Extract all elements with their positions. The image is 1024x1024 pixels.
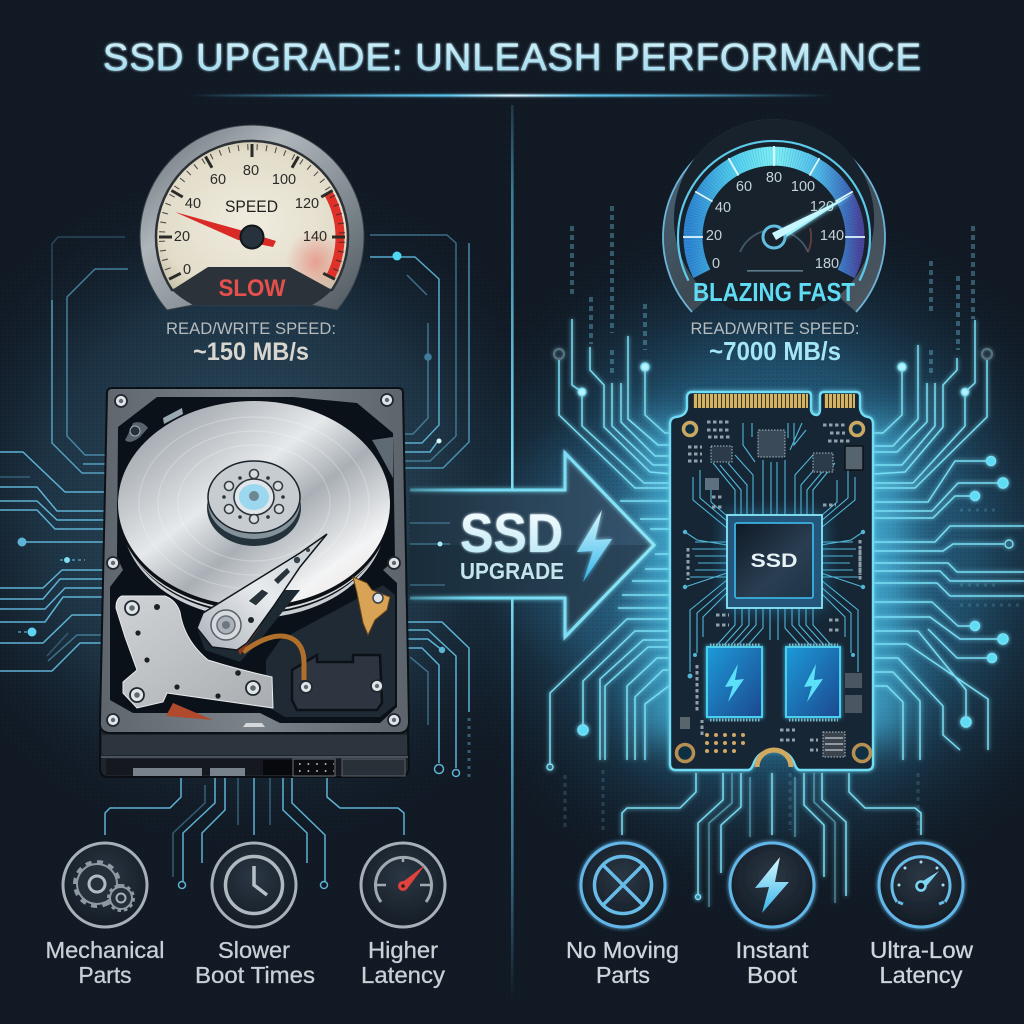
magnet plate xyxy=(116,596,273,720)
gauge numbers: 140 xyxy=(303,229,327,245)
icon: bolt xyxy=(725,664,744,702)
gauge numbers xyxy=(174,163,327,278)
chip label: SSD xyxy=(750,551,798,572)
label xyxy=(46,937,164,988)
spindle hub xyxy=(207,461,301,546)
read/write speed: HDD: READ/WRITE SPEED: xyxy=(166,319,336,338)
gauge numbers: 120 xyxy=(810,199,834,215)
gauge numbers: 0 xyxy=(712,256,720,272)
title: SSD UPGRADE: UNLEASH PERFORMANCE xyxy=(103,37,921,79)
gauge bezel xyxy=(140,125,364,310)
label: Instant xyxy=(736,937,809,963)
gauge numbers: 40 xyxy=(715,200,731,216)
icon: lightning bolt xyxy=(577,510,612,582)
benefit: higher latency xyxy=(361,843,446,988)
SSD circuit board xyxy=(670,392,873,770)
circuit traces: left side xyxy=(0,235,469,888)
gold contacts xyxy=(693,394,855,408)
actuator arm xyxy=(197,534,327,680)
drive cavity xyxy=(110,397,397,723)
speedometer: slow HDD gauge xyxy=(140,125,364,310)
icon: bolt xyxy=(804,664,823,702)
label: Parts xyxy=(78,962,132,988)
label: Boot xyxy=(747,962,798,988)
gauge dial face xyxy=(156,141,348,290)
small components xyxy=(680,422,863,757)
arrow label UPGRADE: UPGRADE xyxy=(460,558,564,584)
benefit: mechanical parts xyxy=(46,843,164,988)
gauge numbers: 80 xyxy=(766,170,782,186)
gauge numbers xyxy=(706,170,844,272)
benefit: instant boot xyxy=(730,843,814,988)
benefit: slower boot times xyxy=(195,843,315,988)
stacked platters xyxy=(122,418,386,618)
benefit: ultra-low latency xyxy=(870,843,973,988)
gauge label: SPEED xyxy=(225,198,278,216)
flash chip left xyxy=(707,645,762,720)
icon: lightning xyxy=(730,843,814,927)
read/write speed: SSD: ~7000 MB/s xyxy=(709,336,841,366)
read/write speed: HDD: ~150 MB/s xyxy=(193,338,309,366)
icon: crossed circle xyxy=(581,843,665,927)
drive base xyxy=(100,730,409,777)
arrow body xyxy=(410,453,654,637)
arrow label SSD: SSD xyxy=(460,502,563,564)
hard disk drive xyxy=(100,388,409,777)
gauge numbers: 120 xyxy=(295,196,319,212)
mounting holes xyxy=(676,422,870,762)
gauge numbers: 40 xyxy=(185,196,201,212)
gauge numbers: 80 xyxy=(243,163,259,179)
gauge numbers: 0 xyxy=(183,262,191,278)
gauge numbers: 20 xyxy=(706,228,722,244)
label: Latency xyxy=(880,962,963,988)
upgrade arrow xyxy=(405,453,654,637)
gauge needle xyxy=(780,194,853,239)
icon: latency gauge xyxy=(361,843,445,927)
label: Slower xyxy=(218,937,290,963)
read/write speed: SSD xyxy=(690,319,860,366)
connector pins xyxy=(293,759,335,776)
benefit: no moving parts xyxy=(566,843,679,988)
circuit traces: right side xyxy=(547,319,1024,907)
icon: clock xyxy=(212,843,296,927)
label: Latency xyxy=(361,962,446,988)
controller chip xyxy=(727,515,822,608)
label xyxy=(361,937,446,988)
slow label: SLOW xyxy=(218,275,286,302)
label: Higher xyxy=(368,937,438,963)
label xyxy=(870,937,973,988)
label: No Moving xyxy=(566,937,679,963)
gauge numbers: 140 xyxy=(820,228,844,244)
gauge numbers: 180 xyxy=(815,256,839,272)
blazing fast label: BLAZING FAST xyxy=(693,277,855,307)
label: Parts xyxy=(596,962,650,988)
label xyxy=(195,937,315,988)
connector box xyxy=(292,655,382,710)
icon: gears xyxy=(63,843,147,927)
gauge needle xyxy=(175,212,276,247)
gauge numbers: 20 xyxy=(174,229,190,245)
read/write speed: HDD xyxy=(166,319,336,366)
label: Ultra-Low xyxy=(870,937,973,963)
gauge dial xyxy=(674,119,874,310)
case screws xyxy=(107,394,400,726)
board traces xyxy=(683,423,865,678)
gauge bezel xyxy=(663,119,885,312)
speed band xyxy=(693,156,855,274)
label xyxy=(736,937,809,988)
orange latch xyxy=(353,577,390,635)
glow behind SSD xyxy=(640,420,905,740)
icon: speed dial xyxy=(879,843,963,927)
gauge numbers: 100 xyxy=(272,172,296,188)
label: Boot Times xyxy=(195,962,315,988)
binary data streams xyxy=(565,206,1020,830)
gauge numbers: 60 xyxy=(210,172,226,188)
label: Mechanical xyxy=(46,937,164,963)
read/write speed: SSD: READ/WRITE SPEED: xyxy=(690,319,860,338)
gauge numbers: 100 xyxy=(791,179,815,195)
speedometer: fast SSD gauge xyxy=(663,119,885,312)
gauge lower panel xyxy=(172,267,332,305)
gauge numbers: 60 xyxy=(736,179,752,195)
board outline xyxy=(670,392,873,770)
label xyxy=(566,937,679,988)
top platter xyxy=(118,401,390,606)
flash chip right xyxy=(786,645,840,720)
top plate xyxy=(100,388,409,733)
